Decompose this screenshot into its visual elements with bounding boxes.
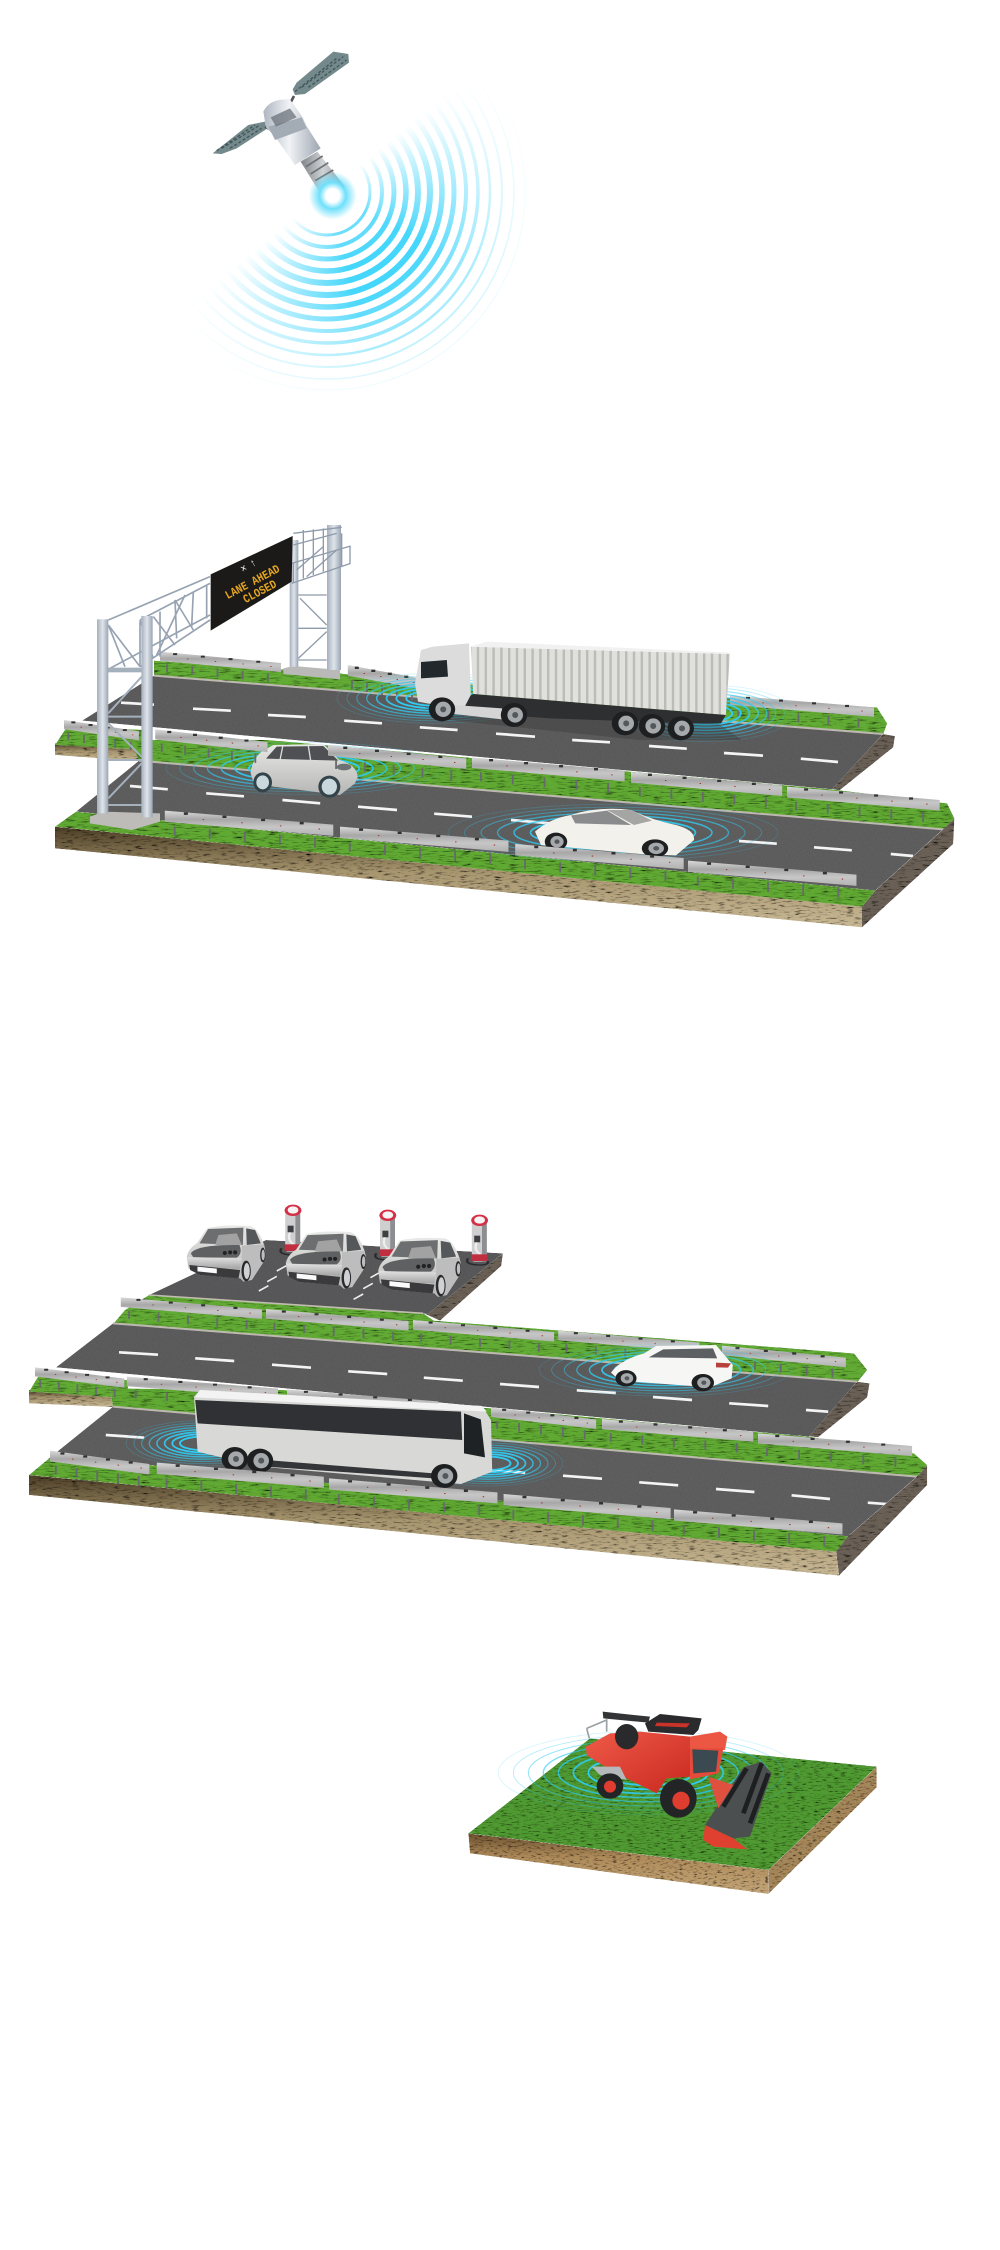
front guard rails <box>64 720 940 898</box>
front grass verge <box>29 1455 851 1552</box>
lower lane dashes <box>106 1435 890 1504</box>
upper lane dashes <box>119 1352 828 1412</box>
back guard rails <box>160 652 874 727</box>
solar panel lower <box>213 122 266 154</box>
sign text <box>216 548 289 614</box>
middle grass verge <box>130 740 954 831</box>
gantry braces <box>108 677 142 805</box>
truck <box>415 642 742 740</box>
middle guard rails <box>35 1367 912 1467</box>
front grass verge <box>55 812 877 907</box>
upper slab soil <box>55 734 895 791</box>
farm soil block <box>468 1767 877 1894</box>
variable message sign panel <box>211 536 293 631</box>
lower road <box>76 761 943 891</box>
harvester body <box>586 1732 690 1793</box>
coach bus <box>194 1390 492 1488</box>
back guard rails <box>121 1297 846 1377</box>
upper road <box>56 1323 857 1437</box>
harvester wheels <box>597 1773 623 1799</box>
white hatchback <box>611 1345 733 1391</box>
small silver car <box>251 744 358 798</box>
lower lane dashes <box>130 786 913 856</box>
sign text: LANE AHEAD <box>224 563 283 603</box>
lower road <box>53 1407 917 1537</box>
white sedan <box>535 809 694 857</box>
sign text: CLOSED <box>242 579 280 607</box>
farm grass <box>468 1738 877 1870</box>
middle grass verge <box>110 1388 927 1477</box>
cutter head <box>705 1762 772 1838</box>
gantry truss <box>108 577 210 668</box>
front guard rails <box>50 1451 842 1546</box>
hatchback rings <box>539 1344 791 1396</box>
harvester rings <box>498 1731 798 1814</box>
upper slab grass <box>55 661 887 750</box>
charging posts <box>280 1205 488 1265</box>
upper lane dashes <box>121 703 838 762</box>
small car rings <box>166 742 442 794</box>
gantry truss, columns and sign panel <box>90 536 293 830</box>
combine harvester <box>586 1712 772 1849</box>
satellite body <box>263 99 321 165</box>
solar panel upper <box>293 52 349 95</box>
satellite nozzle <box>301 152 345 198</box>
parking slab <box>149 1240 503 1321</box>
bus rings <box>126 1421 563 1486</box>
lower slab soil <box>55 827 862 927</box>
gantry front columns <box>97 619 108 813</box>
satellite signal rings <box>210 102 526 390</box>
upper slab soil <box>29 1382 870 1437</box>
emitter glow <box>309 172 357 220</box>
farm scene <box>468 1712 877 1894</box>
upper road <box>82 676 883 789</box>
truck signal rings <box>337 673 793 742</box>
highway scene one <box>55 525 954 927</box>
upper slab grass <box>29 1295 867 1398</box>
highway scene two <box>29 1205 927 1576</box>
gantry base <box>90 812 160 830</box>
overhead gantry rear tower <box>283 525 351 679</box>
lower slab soil <box>29 1475 839 1576</box>
satellite <box>213 52 357 220</box>
grain tank <box>645 1714 702 1735</box>
sedan rings <box>448 804 778 861</box>
sign text: ✕ ↑ <box>239 557 258 575</box>
parked electric cars <box>187 1226 461 1297</box>
